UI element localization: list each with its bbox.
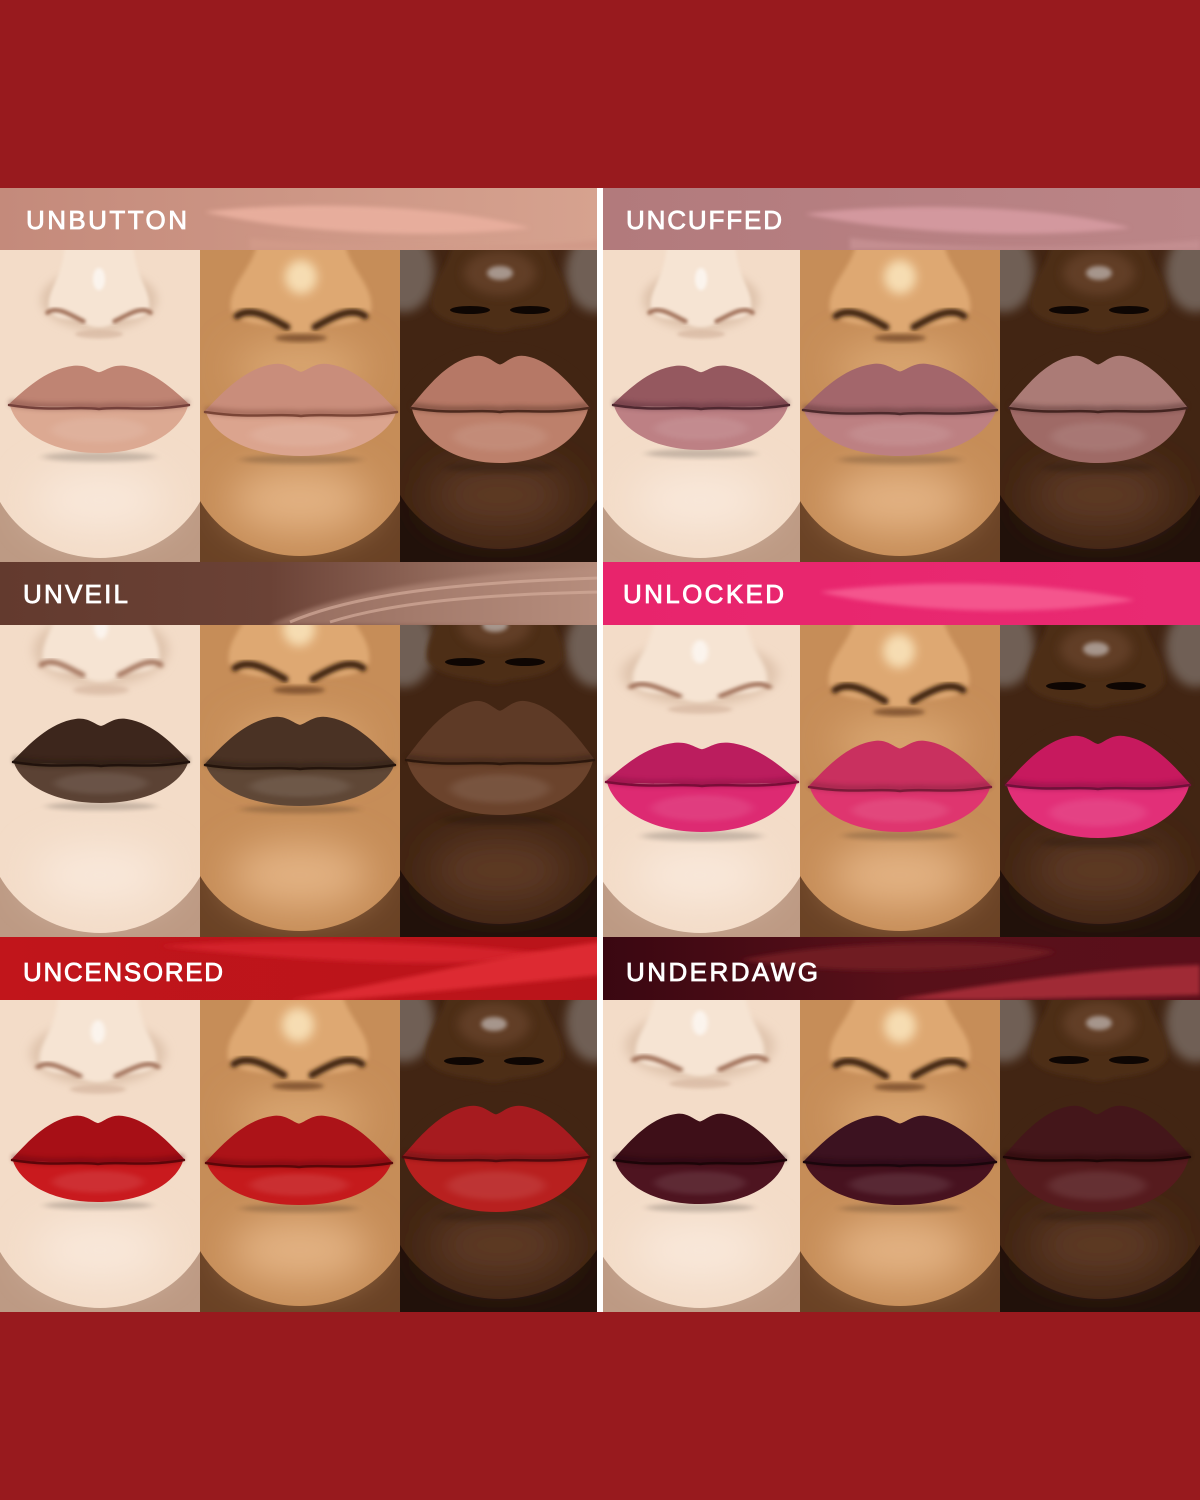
panel: unveil xyxy=(0,562,626,937)
center divider xyxy=(597,188,603,1312)
label: unbutton: UNBUTTON xyxy=(26,205,187,235)
face: light, uncensored xyxy=(0,1000,200,1312)
label: uncuffed: UNCUFFED xyxy=(626,205,782,235)
panel: uncensored xyxy=(0,937,626,1312)
face: dark, unbutton xyxy=(400,250,597,562)
face: light, unlocked xyxy=(603,625,800,937)
header: underdawg xyxy=(600,937,1200,1000)
face: tan, unlocked xyxy=(800,625,1000,937)
panel: unlocked xyxy=(586,562,1200,937)
face: dark, unlocked xyxy=(1000,625,1200,937)
face: tan, uncuffed xyxy=(800,250,1000,562)
face: dark, underdawg xyxy=(1000,1000,1200,1312)
face: tan, unveil xyxy=(200,625,400,937)
header: unlocked xyxy=(600,562,1200,625)
face: dark, uncensored xyxy=(400,1000,597,1312)
label: underdawg: UNDERDAWG xyxy=(626,957,818,987)
face: tan, underdawg xyxy=(800,1000,1000,1312)
panel: uncuffed xyxy=(586,188,1200,562)
header: uncensored xyxy=(0,937,600,1000)
panel: underdawg xyxy=(586,937,1200,1312)
face: light, unveil xyxy=(0,625,200,937)
face: light, underdawg xyxy=(603,1000,800,1312)
face: tan, unbutton xyxy=(200,250,400,562)
face: dark, unveil xyxy=(400,625,597,937)
header: unbutton xyxy=(0,188,600,250)
label: unlocked: UNLOCKED xyxy=(623,579,784,609)
face: tan, uncensored xyxy=(200,1000,400,1312)
panel: unbutton xyxy=(0,188,626,562)
label: uncensored: UNCENSORED xyxy=(23,957,223,987)
header: unveil xyxy=(0,562,600,625)
face: light, uncuffed xyxy=(603,250,800,562)
face: light, unbutton xyxy=(0,250,200,562)
label: unveil: UNVEIL xyxy=(23,579,128,609)
header: uncuffed xyxy=(600,188,1200,250)
face: dark, uncuffed xyxy=(1000,250,1200,562)
